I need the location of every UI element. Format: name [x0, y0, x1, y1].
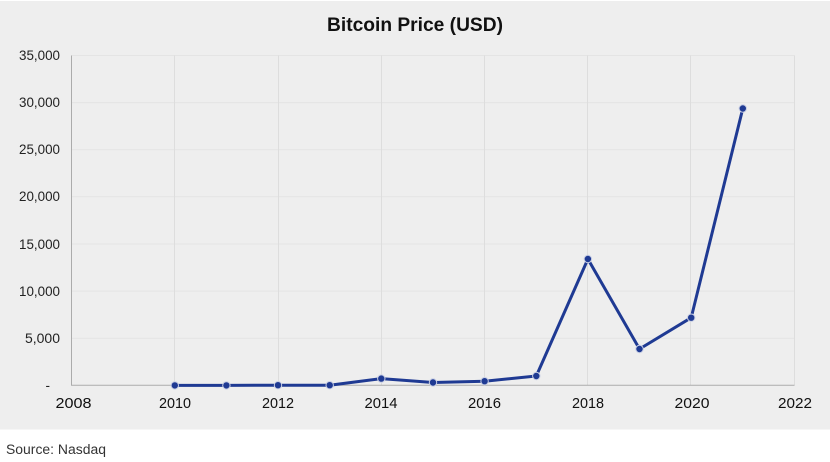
y-axis labels: 25,000 — [19, 142, 60, 157]
y-axis labels: 20,000 — [19, 189, 60, 204]
y-axis labels: 30,000 — [19, 95, 60, 110]
y-axis labels: 10,000 — [19, 284, 60, 299]
y-axis labels: 5,000 — [25, 331, 60, 346]
x-axis labels: 2020 — [674, 395, 710, 412]
x-axis labels: 2012 — [262, 395, 294, 412]
data line: Bitcoin price — [175, 108, 743, 385]
x-axis labels: 2014 — [364, 395, 398, 412]
y-axis labels: - — [46, 378, 50, 393]
x-axis labels: 2022 — [778, 395, 812, 412]
heading: chart title: Bitcoin Price (USD) — [327, 15, 503, 36]
y-axis labels: 15,000 — [19, 237, 60, 252]
chart axes — [72, 56, 794, 385]
x-axis labels: 2008 — [56, 395, 92, 412]
y-axis labels — [19, 48, 60, 393]
y-axis labels: 35,000 — [19, 48, 60, 63]
x-axis labels: 2010 — [159, 395, 191, 412]
x-axis labels: 2018 — [572, 395, 604, 412]
x-axis labels — [56, 395, 812, 412]
source note: Source: Nasdaq — [6, 442, 106, 457]
data point markers — [171, 105, 747, 389]
x-axis labels: 2016 — [468, 395, 501, 412]
